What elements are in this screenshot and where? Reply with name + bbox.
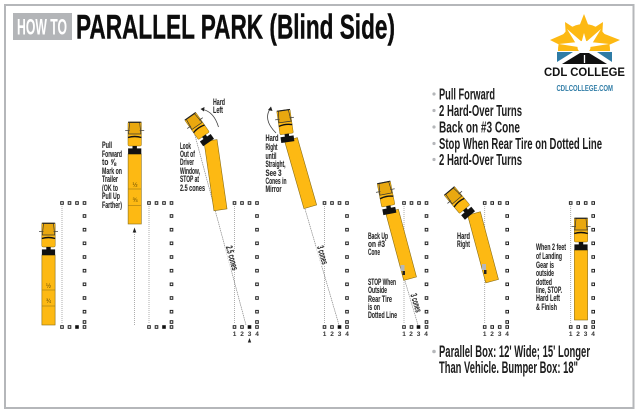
instruction text: Straight, xyxy=(266,159,286,170)
instruction text: Mirror xyxy=(266,184,282,195)
instruction text: Out of xyxy=(180,149,195,160)
how to badge xyxy=(13,13,72,40)
instruction text: Hard xyxy=(457,231,470,242)
instruction text xyxy=(180,141,205,194)
stop instruction text: is on xyxy=(368,302,380,313)
instruction text xyxy=(368,231,388,258)
parking box xyxy=(233,202,259,342)
stop instruction text: STOP When xyxy=(368,277,396,288)
parking box xyxy=(148,202,173,328)
parking box: 2 xyxy=(576,331,580,338)
parking box xyxy=(402,202,428,338)
instruction text: Hard Left xyxy=(536,293,560,304)
label: 2.5 cones: 2.5 cones xyxy=(223,245,240,272)
instruction text: Gear is xyxy=(536,260,554,271)
instruction text: When 2 feet xyxy=(536,242,566,253)
truck xyxy=(572,218,590,320)
instruction text: Cones in xyxy=(266,176,287,187)
step 4: hard right xyxy=(266,106,349,338)
instruction text xyxy=(457,231,470,250)
parking box: 4 xyxy=(505,331,509,338)
step 2: pull forward xyxy=(102,122,173,328)
stop instruction text: Dotted Line xyxy=(368,310,397,321)
sight line xyxy=(405,281,418,325)
instruction text: on #3 xyxy=(368,239,385,250)
parking box: 1 xyxy=(569,331,573,338)
truck xyxy=(39,223,58,325)
instruction text: Right xyxy=(457,239,470,250)
step 3: hard left xyxy=(180,97,259,342)
label: 3 cones xyxy=(314,244,330,266)
instruction text: Pull xyxy=(102,140,112,151)
label: 3 cones xyxy=(407,292,424,314)
step 7: finish xyxy=(536,202,595,338)
truck: ¾ xyxy=(132,198,138,204)
icon: sun and road xyxy=(550,14,620,79)
instruction text: Mark on xyxy=(102,166,122,177)
parking box xyxy=(61,202,86,328)
box dimensions note xyxy=(432,342,590,377)
parking box: 2 xyxy=(409,331,413,338)
parking box: 3 xyxy=(248,331,252,338)
truck xyxy=(442,185,498,283)
parking box: 3 xyxy=(417,331,421,338)
parking box: 4 xyxy=(345,331,349,338)
truck: ¾ xyxy=(46,299,52,305)
label: hard left: Hard xyxy=(213,97,225,108)
parking box xyxy=(483,202,509,338)
instruction text: & Finish xyxy=(536,302,557,313)
arrow: hard left xyxy=(200,107,218,127)
parking box: 3 xyxy=(584,331,588,338)
parking box: 4 xyxy=(424,331,428,338)
steps list: 2 Hard-Over Turns xyxy=(439,152,522,169)
instruction text: 2.5 cones xyxy=(180,183,205,194)
parking box: 4 xyxy=(591,331,595,338)
steps list xyxy=(432,86,602,169)
instruction text xyxy=(102,140,122,211)
parking box: 1 xyxy=(233,331,237,338)
step 5: back up on cone 3 xyxy=(368,180,428,338)
instruction text: STOP at xyxy=(180,174,199,185)
step 6: hard right xyxy=(442,185,509,338)
arrow: hard right xyxy=(268,106,276,133)
how to badge: HOW TO xyxy=(17,14,67,40)
instruction text xyxy=(536,242,566,313)
truck xyxy=(182,111,227,211)
parking box: 1 xyxy=(483,331,487,338)
instruction text xyxy=(266,133,287,195)
logo: CDL College xyxy=(544,14,625,93)
arrow: pull forward xyxy=(133,228,136,325)
parking box: 4 xyxy=(255,331,259,338)
instruction text: Pull Up xyxy=(102,191,120,202)
instruction text: dotted xyxy=(536,277,552,288)
parking box: 3 xyxy=(498,331,502,338)
truck xyxy=(125,122,144,224)
logo wordmark: CDL COLLEGE xyxy=(544,67,625,79)
steps list: 2 Hard-Over Turns xyxy=(439,103,522,120)
stop instruction text xyxy=(368,277,397,321)
instruction text: See 3 xyxy=(266,168,282,179)
truck: ½ xyxy=(132,182,138,189)
stop instruction text: Outside xyxy=(368,285,387,296)
instruction text: Forward xyxy=(102,149,122,160)
instruction text: Farther) xyxy=(102,200,122,211)
label: 3 cones: 3 cones xyxy=(407,292,424,314)
instruction text: to ⅝ xyxy=(102,157,117,168)
truck xyxy=(374,180,416,280)
parking box: 2 xyxy=(240,331,244,338)
instruction text: Look xyxy=(180,141,191,152)
step 1: starting position xyxy=(39,202,86,328)
instruction text: Trailer xyxy=(102,174,118,185)
label: 3 cones: 3 cones xyxy=(314,244,330,266)
sight line xyxy=(305,209,339,325)
main title: PARALLEL PARK (Blind Side) xyxy=(76,9,395,47)
instruction text: (OK to xyxy=(102,183,118,194)
steps list: Pull Forward xyxy=(439,86,495,104)
parking box xyxy=(569,202,595,338)
label: hard left xyxy=(213,97,225,116)
truck: ½ xyxy=(46,283,51,290)
steps list: Back on #3 Cone xyxy=(439,120,520,136)
parking box: 2 xyxy=(490,331,494,338)
parking box: 3 xyxy=(338,331,342,338)
instruction text: Back Up xyxy=(368,231,388,242)
instruction text: until xyxy=(266,151,276,162)
instruction text: Window, xyxy=(180,166,200,177)
instruction text: Hard xyxy=(266,133,279,144)
label: 2.5 cones xyxy=(223,245,240,272)
logo url: CDLCOLLEGE.COM xyxy=(556,83,613,93)
parking box: 1 xyxy=(323,331,327,338)
sight line xyxy=(193,128,246,325)
parking box: 1 xyxy=(402,331,406,338)
title block xyxy=(13,9,395,47)
instruction text: outside xyxy=(536,268,554,279)
instruction text: Driver xyxy=(180,157,194,168)
truck xyxy=(274,109,317,209)
stop instruction text: Rear Tire xyxy=(368,294,392,305)
instruction text: Right xyxy=(266,142,278,153)
parking box xyxy=(323,202,349,338)
label: hard left: Left xyxy=(213,105,223,116)
instruction text: line, STOP. xyxy=(536,285,562,296)
instruction text: of Landing xyxy=(536,251,562,262)
instruction text: Cone xyxy=(368,247,380,258)
parking box: 2 xyxy=(330,331,334,338)
